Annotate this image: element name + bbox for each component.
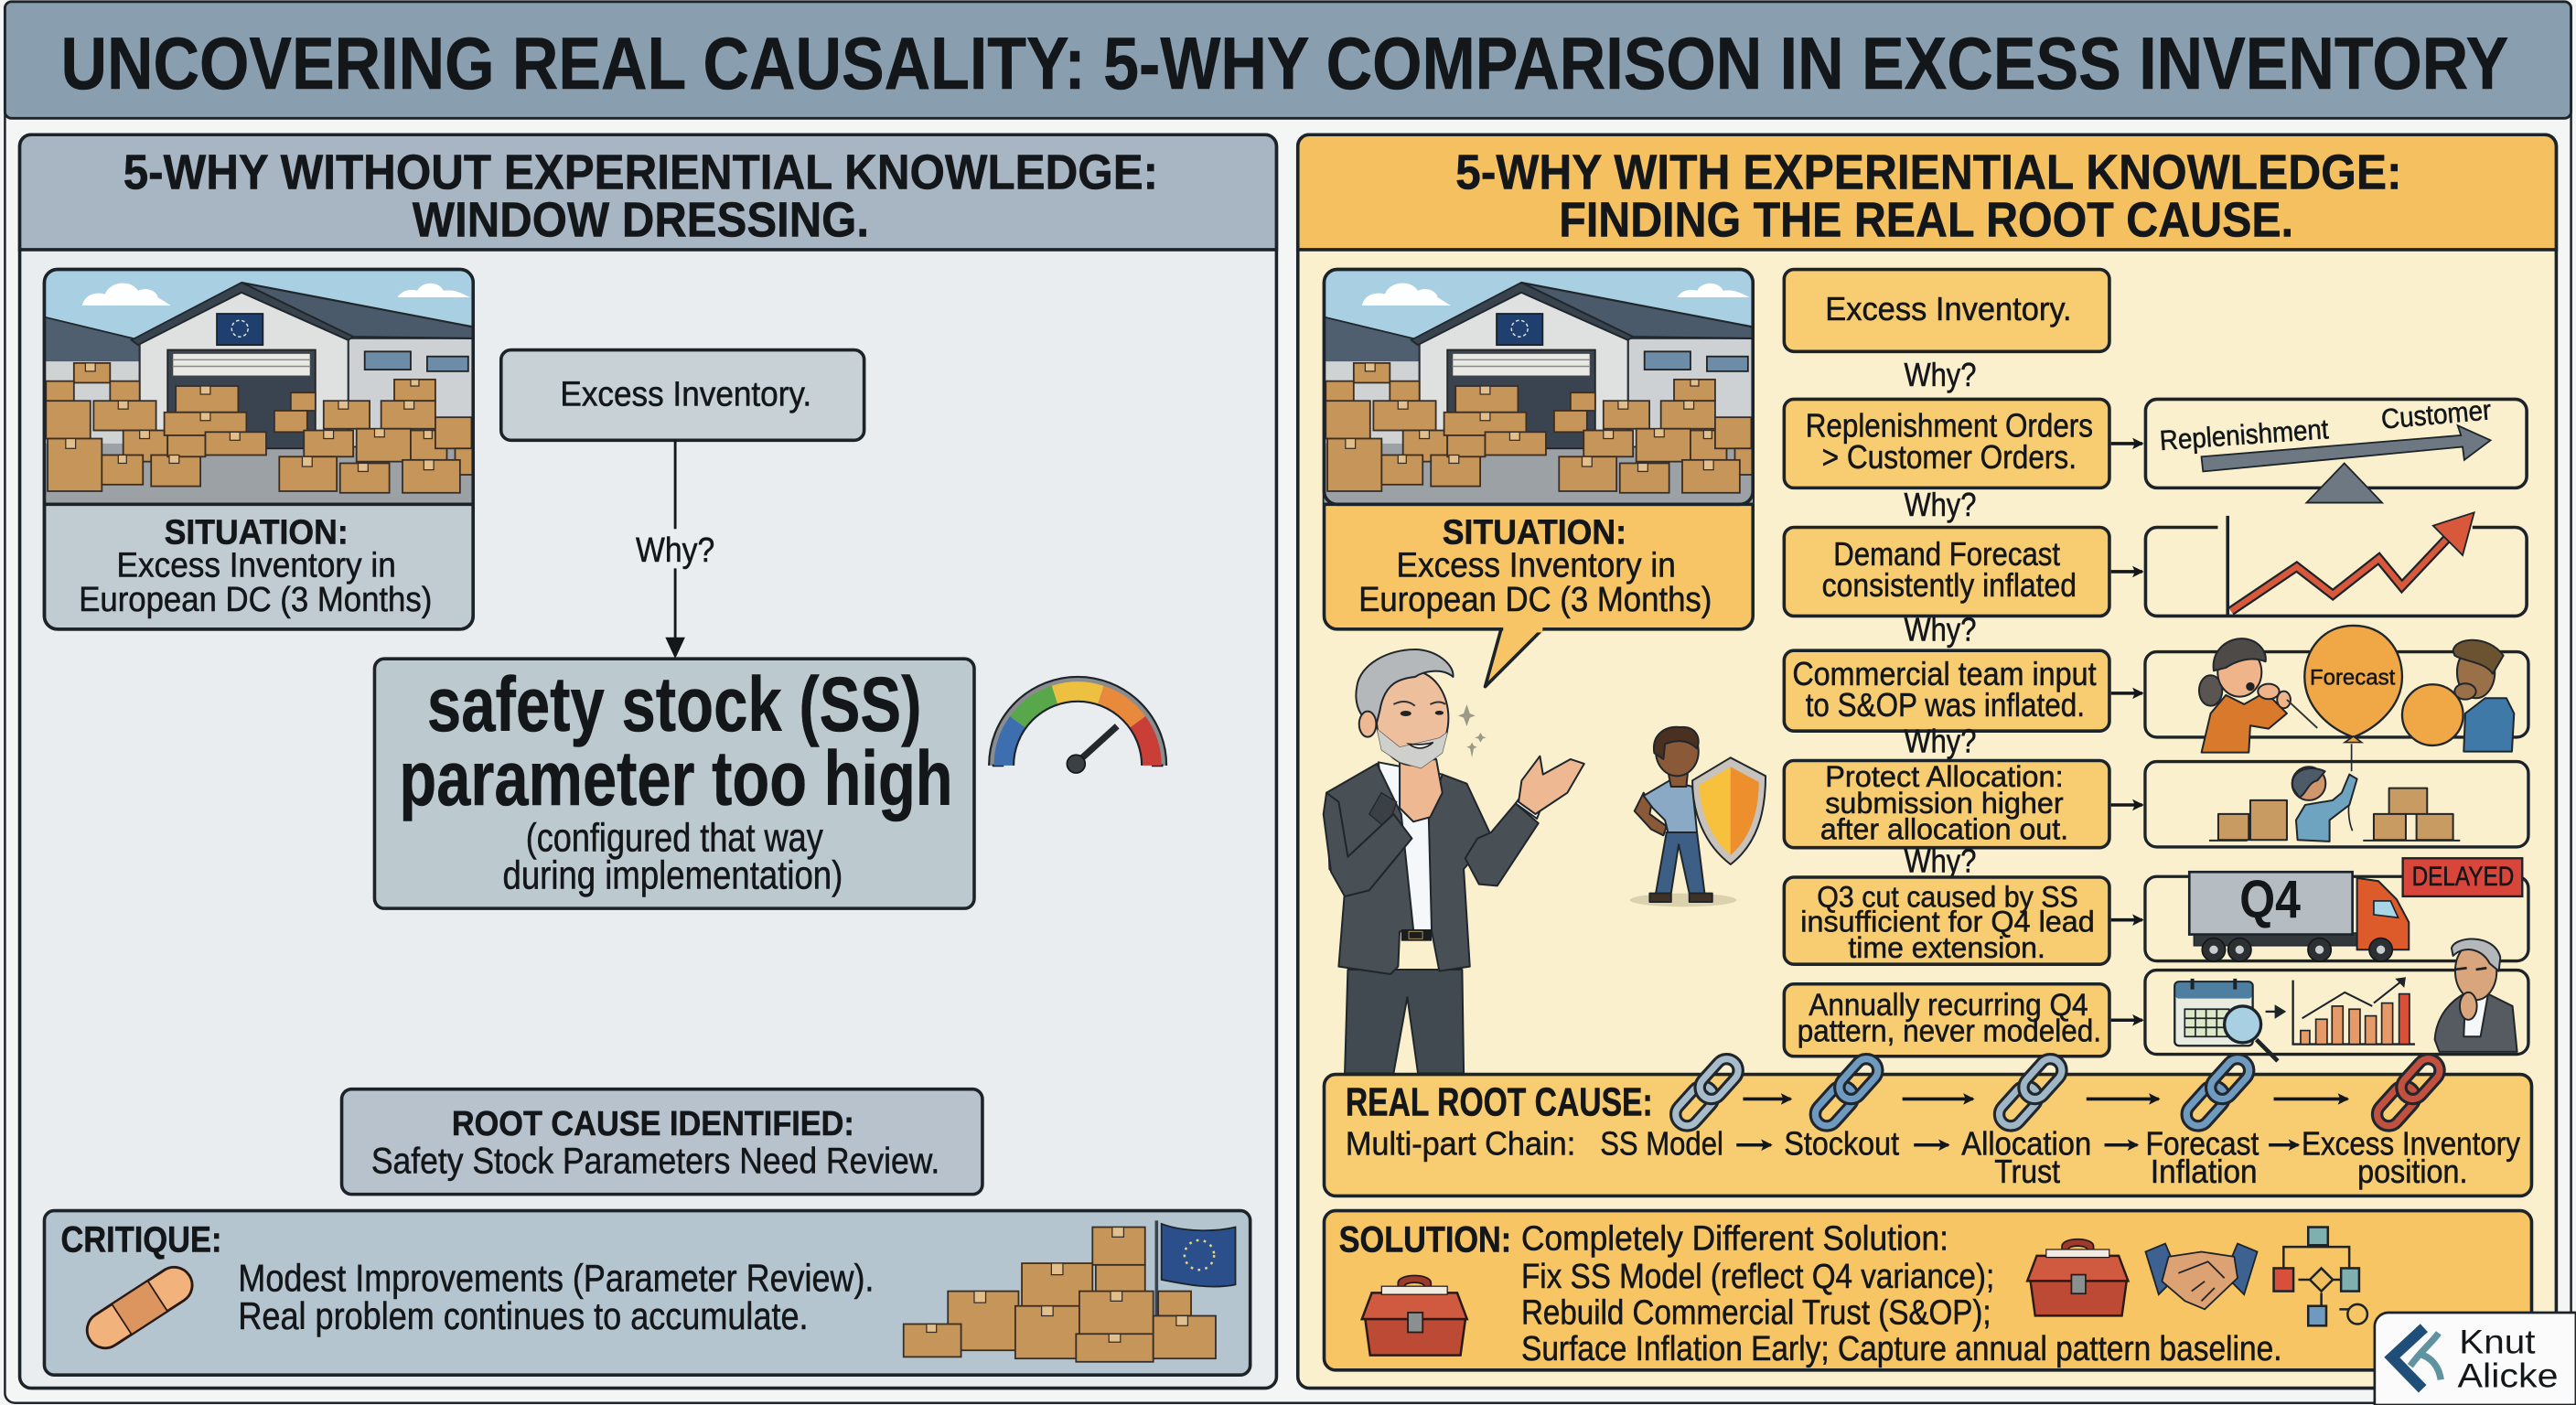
real root cause box: SS Model (1600, 1125, 1723, 1163)
situation speech bubble with warehouse illustration: Excess Inventory in (1397, 545, 1676, 584)
label: why: Why? (1904, 610, 1976, 648)
why box 4: commercial team input: Commercial team input (1792, 655, 2097, 692)
why box 3: demand forecast (1784, 527, 2109, 616)
box: safety stock parameter too high (374, 659, 974, 908)
visual: rising forecast chart (2145, 512, 2527, 616)
why box 5: protect allocation: after allocation out. (1820, 813, 2068, 846)
icon: process flow diagram (2274, 1228, 2367, 1325)
chain link icons (1671, 1054, 2444, 1131)
logo: Knut Alicke (2375, 1313, 2576, 1405)
stamp: delayed (2403, 858, 2522, 896)
icon: handshake (2145, 1243, 2258, 1309)
situation card with warehouse illustration: European DC (3 Months) (79, 580, 432, 618)
icon: toolbox (1362, 1276, 1467, 1356)
stamp: delayed: DELAYED (2412, 862, 2514, 892)
logo: Knut Alicke: Alicke (2458, 1357, 2559, 1395)
why box 2: replenishment orders: Replenishment Orders (1806, 407, 2093, 445)
panel heading: finding the real root cause: 5-WHY WITH EXPERIENTIAL KNOWLEDGE: (1455, 145, 2402, 200)
box: root cause identified: Safety Stock Parameters Need Review. (371, 1141, 939, 1181)
critique box: Real problem continues to accumulate. (238, 1295, 809, 1337)
why box 3: demand forecast: Demand Forecast (1833, 535, 2060, 573)
box: safety stock parameter too high: (configured that way (526, 816, 823, 860)
icon: stacked boxes with EU flag (904, 1220, 1236, 1362)
why box 6: Q3 cut: Q3 cut caused by SS (1817, 880, 2078, 913)
label: why: Why? (1904, 842, 1976, 880)
real root cause box: Forecast (2145, 1125, 2259, 1163)
real root cause box: Excess Inventory (2302, 1125, 2520, 1163)
solution box (1324, 1211, 2531, 1370)
real root cause box: Multi-part Chain: (1346, 1125, 1575, 1163)
panel heading: window dressing: WINDOW DRESSING. (413, 193, 869, 248)
visual: replenishment vs customer balance (2145, 394, 2527, 503)
panel heading: finding the real root cause: FINDING THE REAL ROOT CAUSE. (1559, 193, 2293, 248)
situation card with warehouse illustration (44, 270, 473, 629)
arrow: why: Why? (636, 531, 714, 569)
situation card with warehouse illustration: SITUATION: (165, 512, 349, 551)
character: person with shield (1630, 727, 1766, 906)
critique box: CRITIQUE: (60, 1219, 221, 1260)
why box 3: demand forecast: consistently inflated (1822, 566, 2077, 604)
why box 1: excess inventory: Excess Inventory. (1825, 290, 2072, 327)
real root cause box: Inflation (2151, 1153, 2258, 1190)
why box 4: commercial team input: to S&OP was inflated. (1806, 686, 2085, 724)
real root cause box (1324, 1054, 2531, 1196)
why box 6: Q3 cut (1784, 877, 2109, 964)
icon: second toolbox (2027, 1239, 2128, 1315)
why box 5: protect allocation: submission higher (1825, 787, 2064, 820)
critique box (44, 1211, 1250, 1375)
visual: delayed Q4 truck: Q4 (2239, 870, 2301, 929)
box: excess inventory: Excess Inventory. (560, 375, 811, 413)
why box 4: commercial team input (1784, 650, 2109, 731)
panel: without experiential knowledge (20, 134, 1276, 1389)
connector arrows (2111, 444, 2142, 1020)
logo: Knut Alicke: Knut (2459, 1322, 2536, 1360)
real root cause box: Allocation (1961, 1125, 2091, 1163)
panel heading: finding the real root cause (1298, 134, 2556, 250)
why box 6: Q3 cut: insufficient for Q4 lead (1800, 905, 2095, 938)
why box 2: replenishment orders: > Customer Orders. (1822, 438, 2077, 476)
visual: replenishment vs customer balance: Replenishment (2159, 413, 2330, 456)
visual: team inflating forecast balloon: Forecast (2310, 665, 2396, 690)
real root cause box: REAL ROOT CAUSE: (1346, 1080, 1653, 1124)
why box 6: Q3 cut: time extension. (1848, 931, 2045, 964)
solution box: Fix SS Model (reflect Q4 variance); (1521, 1257, 1994, 1295)
label: why: Why? (1904, 486, 1976, 523)
situation speech bubble with warehouse illustration: European DC (3 Months) (1358, 580, 1712, 618)
situation card with warehouse illustration: Excess Inventory in (117, 545, 396, 584)
why box 7: annually recurring pattern (1784, 984, 2109, 1056)
icon: gauge (989, 677, 1166, 773)
why box 7: annually recurring pattern: Annually recurring Q4 (1809, 988, 2088, 1023)
visual: delayed Q4 truck (2145, 858, 2528, 961)
visual: calendar, analysis chart and pensive man (2145, 938, 2528, 1061)
label: why: Why? (1904, 723, 1976, 760)
critique box: Modest Improvements (Parameter Review). (238, 1258, 874, 1300)
why box 7: annually recurring pattern: pattern, never modeled. (1798, 1014, 2101, 1049)
box: safety stock parameter too high: safety stock (SS) (427, 661, 921, 747)
real root cause box: Stockout (1784, 1125, 1899, 1163)
why box 5: protect allocation: Protect Allocation: (1825, 760, 2064, 793)
panel heading: window dressing: 5-WHY WITHOUT EXPERIENTIAL KNOWLEDGE: (123, 145, 1158, 200)
box: safety stock parameter too high: parameter too high (399, 735, 953, 821)
solution box: Completely Different Solution: (1521, 1219, 1948, 1258)
solution box: Rebuild Commercial Trust (S&OP); (1521, 1292, 1991, 1331)
label: why: Why? (1904, 356, 1976, 393)
title banner (5, 2, 2571, 118)
box: root cause identified: ROOT CAUSE IDENTIFIED: (452, 1104, 854, 1142)
visual: person releasing balloon among boxes (2145, 744, 2528, 847)
situation speech bubble with warehouse illustration (1324, 270, 1753, 687)
arrow: why (631, 440, 720, 659)
character: experienced consultant (1324, 649, 1584, 1073)
solution box: Surface Inflation Early; Capture annual pattern baseline. (1521, 1329, 2282, 1367)
visual: replenishment vs customer balance: Customer (2380, 394, 2493, 435)
real root cause box: Trust (1994, 1153, 2060, 1190)
real root cause box: position. (2357, 1153, 2467, 1190)
box: safety stock parameter too high: during implementation) (503, 854, 843, 898)
situation speech bubble with warehouse illustration: SITUATION: (1443, 512, 1626, 551)
why box 1: excess inventory (1784, 270, 2109, 351)
visual: team inflating forecast balloon (2145, 626, 2528, 753)
icon: bandage (80, 1260, 199, 1355)
panel: with experiential knowledge (1298, 134, 2556, 1389)
chain arrows (1736, 1099, 2347, 1145)
solution box: SOLUTION: (1339, 1219, 1511, 1260)
box: root cause identified (342, 1089, 982, 1195)
panel heading: window dressing (20, 134, 1276, 250)
box: excess inventory (501, 350, 864, 440)
why box 5: protect allocation (1784, 760, 2109, 848)
why box 2: replenishment orders (1784, 399, 2109, 488)
